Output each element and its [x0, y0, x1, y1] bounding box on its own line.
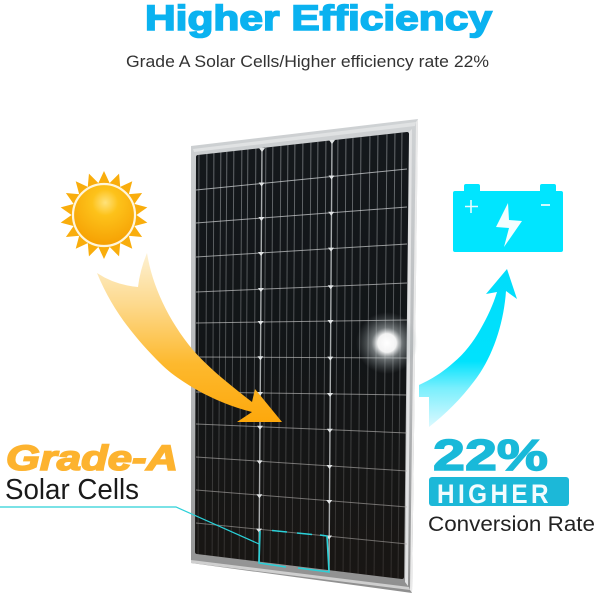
higher label: HIGHER — [437, 480, 549, 509]
subtitle: Grade A Solar Cells/Higher efficiency rate 22% — [126, 53, 489, 71]
arrow: sunlight onto panel — [97, 253, 282, 422]
higher badge — [429, 477, 569, 506]
stat: 22% higher conversion rate — [428, 431, 595, 536]
light glare — [356, 312, 418, 374]
column busbars — [259, 140, 332, 571]
solar panel — [191, 119, 418, 593]
22 percent figure: 22% — [433, 431, 548, 480]
arrow: energy to battery — [419, 269, 517, 427]
title: Higher Efficiency — [145, 0, 493, 38]
plus sign — [465, 200, 478, 213]
dashed cell highlight — [259, 530, 329, 572]
solar cells — [197, 134, 407, 577]
icon: sun — [59, 171, 149, 259]
cell finger lines — [198, 130, 402, 585]
sun rays — [59, 171, 149, 259]
solar cells label: Solar Cells — [5, 474, 139, 506]
conversion rate label: Conversion Rate — [428, 513, 595, 536]
cell row lines — [196, 169, 407, 544]
icon: battery — [453, 184, 563, 252]
busbar junction markers — [256, 140, 335, 540]
callout: grade-A solar cells — [0, 439, 329, 572]
panel frame — [191, 119, 418, 593]
lightning bolt — [496, 203, 522, 247]
minus sign — [541, 204, 550, 206]
sun disc — [73, 184, 135, 246]
grade-A label: Grade-A — [6, 439, 178, 478]
leader line — [0, 507, 259, 544]
battery body — [453, 184, 563, 252]
